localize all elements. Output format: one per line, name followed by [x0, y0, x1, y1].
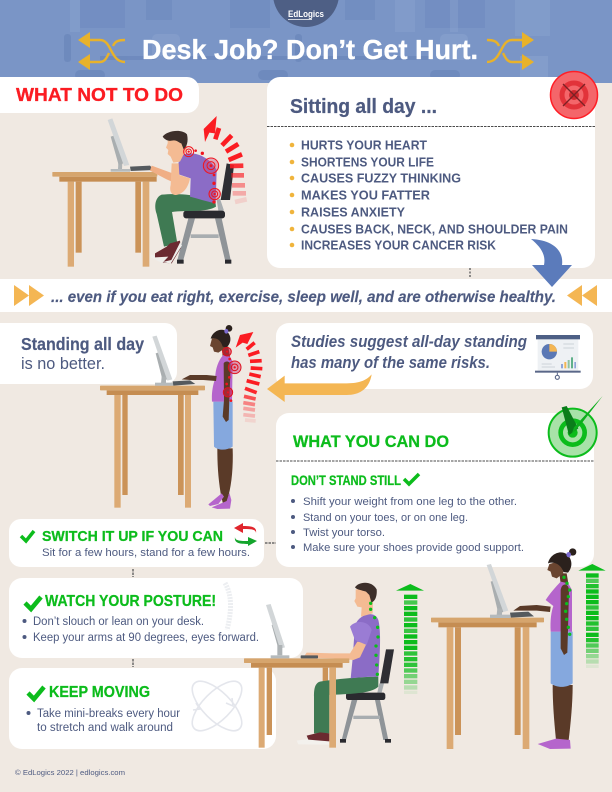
panel: studies suggest: Studies suggest all-day standing — [291, 332, 528, 351]
panel: switch it up: SWITCH IT UP IF YOU CAN — [42, 529, 223, 545]
icon: green target with check — [549, 396, 603, 457]
panel: watch your posture: Keep your arms at 90 degrees, eyes forward. — [33, 632, 259, 644]
arrow: blue curved down — [531, 239, 572, 287]
panel: watch your posture: Don’t slouch or lean on your desk. — [33, 616, 204, 628]
chair — [177, 163, 234, 264]
panel: standing all day: Standing all day — [21, 334, 144, 354]
desk top and front legs — [244, 658, 349, 748]
chair — [340, 649, 394, 743]
icon: presentation board — [535, 335, 581, 379]
desk — [100, 386, 205, 508]
icon: spine — [225, 583, 231, 630]
list: risks of sitting: INCREASES YOUR CANCER RISK — [301, 238, 497, 252]
list: don't stand still tips: Make sure your shoes provide good support. — [303, 542, 524, 554]
spine dots — [369, 602, 380, 676]
panel: what not to do heading — [0, 77, 199, 113]
panel: watch your posture: WATCH YOUR POSTURE! — [45, 593, 216, 610]
logo badge — [273, 0, 339, 27]
icon: left yellow crossing arrows — [78, 32, 125, 70]
list: don't stand still tips: Stand on your toes, or on one leg. — [303, 512, 468, 524]
man body — [297, 583, 380, 745]
list: don't stand still tips: Shift your weight from one leg to the other. — [303, 496, 517, 508]
list: risks of sitting: CAUSES BACK, NECK, AND SHOULDER PAIN — [301, 222, 568, 236]
panel: studies suggest — [276, 323, 593, 389]
icon: right yellow crossing arrows — [487, 32, 534, 70]
list: risks of sitting: RAISES ANXIETY — [301, 204, 405, 220]
list: don't stand still tips — [291, 496, 524, 554]
panel: keep moving: Take mini-breaks every hour — [37, 708, 180, 720]
panel: studies suggest: has many of the same risks. — [291, 353, 490, 372]
monitor — [108, 118, 130, 172]
monitor — [487, 564, 510, 618]
spine dots — [562, 576, 571, 636]
list: risks of sitting: HURTS YOUR HEART — [301, 138, 427, 152]
desk — [431, 618, 544, 749]
panel: keep moving: KEEP MOVING — [49, 684, 150, 701]
arrow: red curved spine strain — [204, 116, 247, 202]
arrow: green upright — [396, 584, 424, 694]
panel: keep moving: to stretch and walk around — [37, 722, 173, 734]
panel: keep moving — [9, 668, 276, 749]
monitor — [266, 604, 289, 658]
icon: red no target — [550, 71, 598, 119]
panel: standing all day: is no better. — [21, 354, 105, 373]
title: Desk Job? Don’t Get Hurt. — [142, 34, 478, 65]
woman body — [513, 548, 576, 749]
arrow: green upright — [578, 564, 606, 668]
panel: switch it up — [9, 519, 264, 567]
list: don't stand still tips: Twist your torso. — [303, 527, 385, 539]
panel: what you can do — [276, 413, 594, 567]
figure: man sitting with good posture — [244, 583, 424, 748]
pain points — [184, 147, 220, 204]
connector dash below sitting panel — [469, 268, 471, 278]
icon: orbit arrows — [184, 673, 250, 739]
keyboard — [130, 166, 154, 171]
monitor — [152, 336, 173, 386]
desk — [52, 172, 157, 267]
figure: man sitting slouched at desk — [52, 116, 247, 267]
heading: don't stand still: DON’T STAND STILL — [291, 473, 401, 488]
panel: watch your posture — [9, 578, 303, 658]
figure: woman standing with good posture — [431, 548, 606, 749]
panel: sitting all day — [267, 77, 595, 268]
keyboard — [173, 380, 195, 386]
header banner — [0, 0, 612, 83]
keyboard — [510, 612, 534, 618]
ribbon: even if you eat right — [0, 279, 612, 312]
panel: standing all day — [0, 323, 177, 384]
panel: what not to do heading: WHAT NOT TO DO — [16, 84, 183, 105]
arrow: orange pointing left — [267, 374, 372, 402]
figure: woman standing with pain points — [100, 325, 262, 509]
woman body — [182, 325, 233, 509]
ribbon: even if you eat right: ... even if you eat right, exercise, sleep well, and are otherwise healthy. — [51, 289, 556, 306]
icon: red and green swap arrows — [234, 523, 257, 546]
connectors between tip panels — [133, 543, 276, 667]
man body — [150, 131, 217, 264]
keyboard — [301, 655, 318, 658]
list: risks of sitting: SHORTENS YOUR LIFE — [301, 154, 434, 170]
footer credit: © EdLogics 2022 | edlogics.com — [15, 768, 125, 777]
panel: what you can do: WHAT YOU CAN DO — [293, 433, 449, 451]
list: risks of sitting: CAUSES FUZZY THINKING — [301, 170, 461, 186]
list: risks of sitting — [290, 138, 568, 252]
list: risks of sitting: MAKES YOU FATTER — [301, 188, 430, 202]
panel: switch it up: Sit for a few hours, stand for a few hours. — [42, 547, 250, 559]
desk — [259, 668, 328, 748]
pain points — [223, 347, 241, 402]
arrow: red curved posture strain — [236, 332, 262, 421]
heading: sitting all day: Sitting all day ... — [290, 96, 437, 118]
logo badge: EdLogics — [288, 9, 324, 19]
